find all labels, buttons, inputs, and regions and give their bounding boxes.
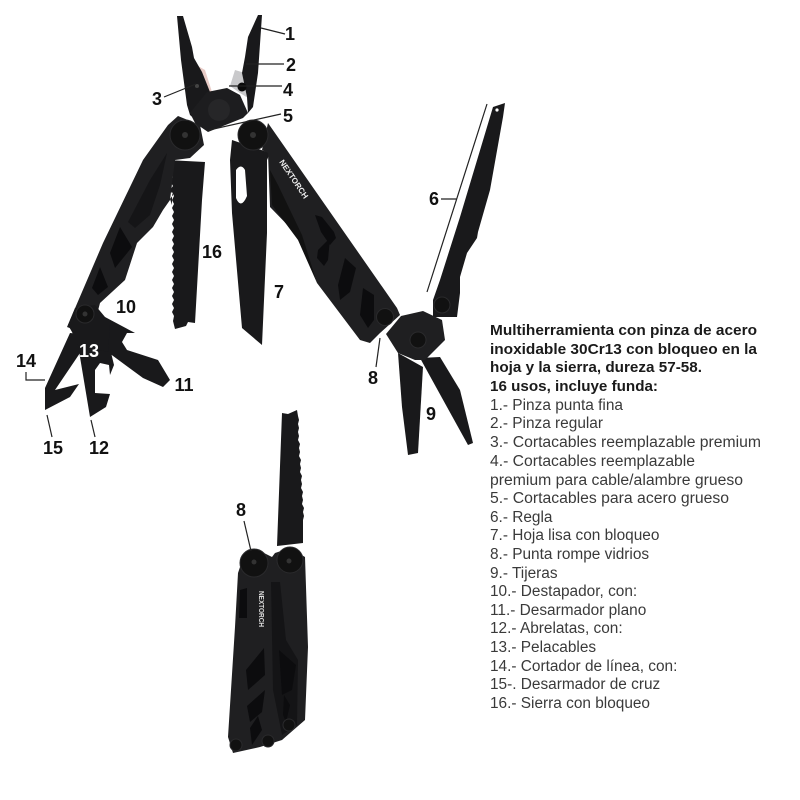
brand: NEXTORCH xyxy=(277,158,310,201)
list of uses: 6.- Regla xyxy=(490,509,553,526)
saw blade xyxy=(167,160,205,329)
label 13: 13 xyxy=(79,341,99,361)
heading xyxy=(490,322,758,395)
multitool closed xyxy=(228,410,308,753)
label 15 xyxy=(43,415,63,458)
pliers xyxy=(177,15,262,132)
heading: Multiherramienta con pinza de acero xyxy=(490,322,757,339)
list of uses: 7.- Hoja lisa con bloqueo xyxy=(490,527,659,544)
list of uses: 1.- Pinza punta fina xyxy=(490,397,623,414)
label 11: 11 xyxy=(174,375,194,395)
label 3: 3 xyxy=(152,89,162,109)
list of uses: 8.- Punta rompe vidrios xyxy=(490,546,649,563)
label 16: 16 xyxy=(202,242,222,262)
label 4: 4 xyxy=(283,80,293,100)
heading: hoja y la sierra, dureza 57-58. xyxy=(490,359,702,376)
left handle xyxy=(67,116,204,330)
list of uses xyxy=(490,397,761,712)
list of uses: 2.- Pinza regular xyxy=(490,415,603,432)
list of uses: 3.- Cortacables reemplazable premium xyxy=(490,434,761,451)
label 1 xyxy=(261,24,295,44)
label 12 xyxy=(89,420,109,458)
label 14 xyxy=(16,351,45,380)
label 15: 15 xyxy=(43,438,63,458)
lower tools xyxy=(45,305,170,417)
list of uses: premium para cable/alambre grueso xyxy=(490,472,743,489)
list of uses: 10.- Destapador, con: xyxy=(490,583,637,600)
label 5: 5 xyxy=(283,106,293,126)
list of uses: 14.- Cortador de línea, con: xyxy=(490,658,677,675)
right handle xyxy=(262,123,400,343)
label 4 xyxy=(229,80,293,100)
label 10: 10 xyxy=(116,297,136,317)
smooth blade xyxy=(230,140,270,345)
label 1: 1 xyxy=(285,24,295,44)
scissors xyxy=(376,297,473,455)
list of uses: 11.- Desarmador plano xyxy=(490,602,646,619)
label 8 closed xyxy=(236,500,251,551)
label 6: 6 xyxy=(429,189,439,209)
label 9: 9 xyxy=(426,404,436,424)
label 2: 2 xyxy=(286,55,296,75)
label 8 open: 8 xyxy=(368,368,378,388)
list of uses: 15-. Desarmador de cruz xyxy=(490,676,660,693)
multitool open xyxy=(45,15,505,455)
list of uses: 4.- Cortacables reemplazable xyxy=(490,453,695,470)
list of uses: 9.- Tijeras xyxy=(490,565,558,582)
label 5 xyxy=(209,106,293,130)
list of uses: 5.- Cortacables para acero grueso xyxy=(490,490,729,507)
label 14: 14 xyxy=(16,351,36,371)
heading: inoxidable 30Cr13 con bloqueo en la xyxy=(490,341,758,358)
label 8 closed: 8 xyxy=(236,500,246,520)
description text xyxy=(490,322,761,712)
label 3 xyxy=(152,84,196,109)
list of uses: 13.- Pelacables xyxy=(490,639,596,656)
list of uses: 16.- Sierra con bloqueo xyxy=(490,695,650,712)
ruler xyxy=(433,103,505,317)
label 8 open xyxy=(368,338,380,388)
brand closed: NEXTORCH xyxy=(257,591,264,627)
list of uses: 12.- Abrelatas, con: xyxy=(490,620,623,637)
label 7: 7 xyxy=(274,282,284,302)
label 6 xyxy=(427,104,487,292)
label 2 xyxy=(246,55,296,75)
heading: 16 usos, incluye funda: xyxy=(490,378,658,395)
label 12: 12 xyxy=(89,438,109,458)
